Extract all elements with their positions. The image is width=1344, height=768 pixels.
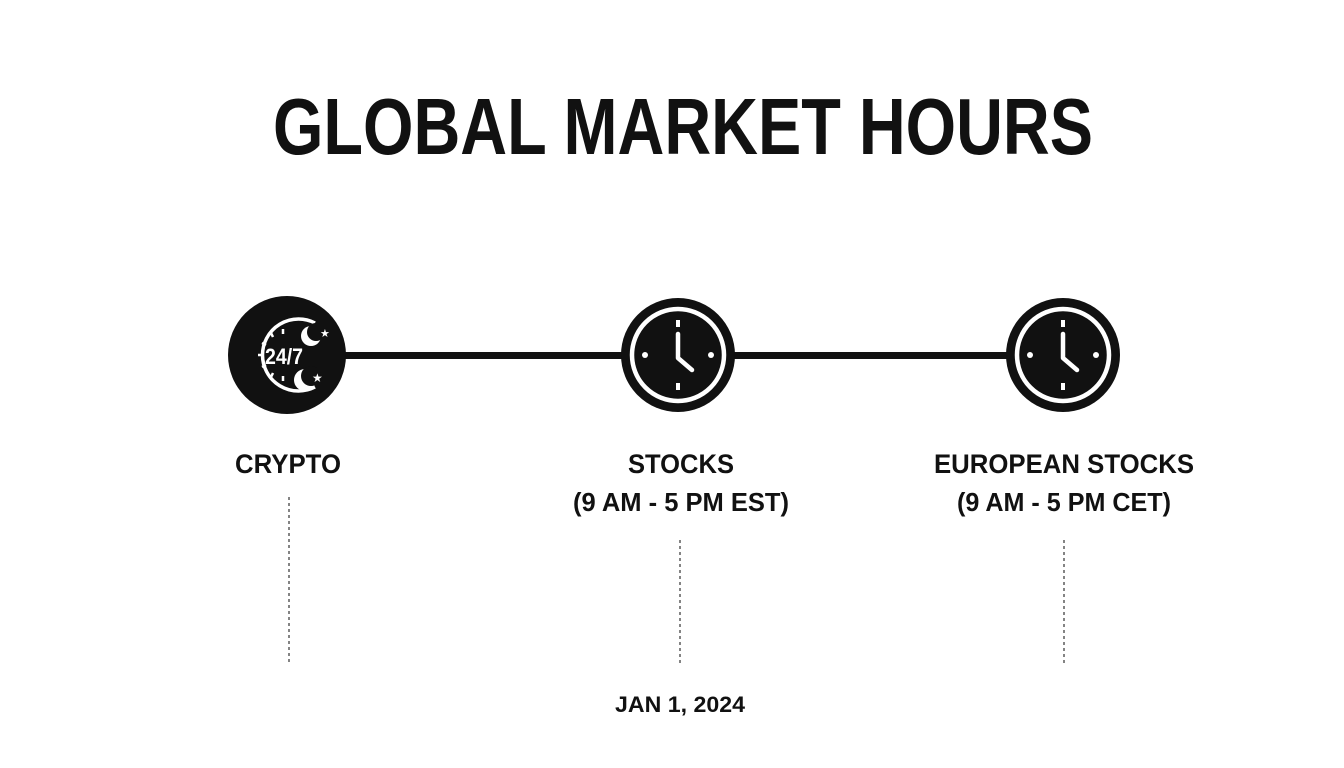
icon: crypto 24/7 [228,296,346,414]
label: stocks: STOCKS [628,449,734,479]
label: stocks: (9 AM - 5 PM EST) [573,487,789,517]
label: european stocks: (9 AM - 5 PM CET) [957,487,1171,517]
label: crypto: CRYPTO [235,449,341,479]
icon: crypto 24/7: ★ [320,328,330,340]
timeline line [290,352,1065,359]
icon: crypto 24/7: 24/7 [265,344,303,369]
icon: european stocks clock [1006,298,1120,412]
title: GLOBAL MARKET HOURS [273,82,1093,171]
icon: crypto 24/7: ★ [312,371,323,385]
label: stocks [573,449,789,517]
label: european stocks: EUROPEAN STOCKS [934,449,1194,479]
label: european stocks [934,449,1194,517]
icon: stocks clock [621,298,735,412]
date label: JAN 1, 2024 [615,692,746,717]
